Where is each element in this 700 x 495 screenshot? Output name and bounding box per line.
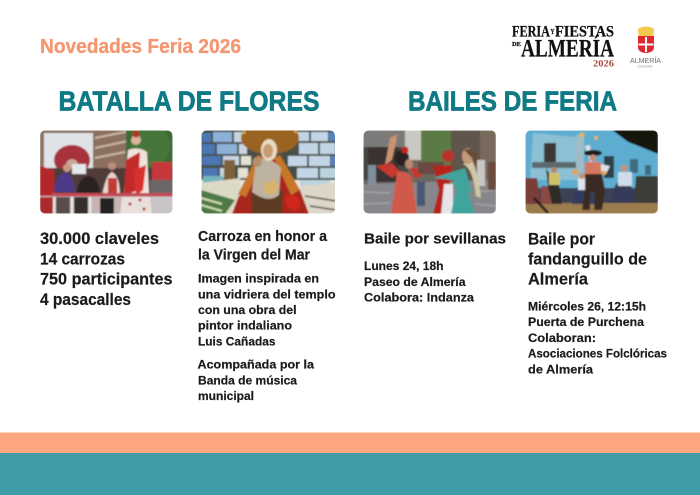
text: baile por fandanguillo de Almería: Asociaciones Folclóricas [528, 347, 667, 361]
text: carroza en honor a la Virgen del Mar [198, 229, 336, 403]
text: cifras de la batalla de flores: 14 carrozas [40, 250, 125, 268]
text: baile por sevillanas [364, 232, 506, 305]
text: carroza en honor a la Virgen del Mar: la Virgen del Mar [198, 248, 310, 264]
logo: Feria y Fiestas de Almería 2026: FERIA [512, 24, 550, 41]
text: carroza en honor a la Virgen del Mar: Banda de música [198, 373, 297, 387]
text: baile por fandanguillo de Almería: Baile por [528, 230, 596, 248]
text: cifras de la batalla de flores [40, 230, 172, 309]
text: carroza en honor a la Virgen del Mar: pintor indaliano [198, 319, 292, 333]
icon: crown [638, 26, 654, 36]
photo: carroza de la batalla de flores [40, 126, 173, 214]
text: cifras de la batalla de flores: 30.000 claveles [40, 230, 159, 248]
heading: Bailes de Feria: BAILES DE FERIA [408, 86, 617, 117]
logo: Feria y Fiestas de Almería 2026 [512, 24, 614, 70]
logo: escudo Almería Ciudad [630, 26, 661, 68]
title: Novedades Feria 2026: Novedades Feria 2026 [40, 36, 241, 58]
text: carroza en honor a la Virgen del Mar: municipal [198, 389, 254, 403]
text: baile por fandanguillo de Almería: Almería [528, 270, 589, 288]
text: baile por fandanguillo de Almería: de Almería [528, 363, 593, 377]
text: baile por fandanguillo de Almería: fandanguillo de [528, 250, 647, 268]
text: carroza en honor a la Virgen del Mar: una vidriera del templo [198, 288, 336, 302]
text: baile por fandanguillo de Almería: Colaboran: [528, 331, 596, 345]
logo: Feria y Fiestas de Almería 2026: 2026 [593, 60, 614, 70]
text: cifras de la batalla de flores: 4 pasacalles [40, 291, 131, 309]
photo: vidriera de la Virgen del Mar [202, 130, 335, 214]
logo: Feria y Fiestas de Almería 2026: DE [512, 41, 521, 48]
text: baile por sevillanas: Paseo de Almería [364, 275, 466, 289]
text: baile por fandanguillo de Almería [528, 230, 667, 377]
text: baile por sevillanas: Lunes 24, 18h [364, 259, 444, 273]
icon: shield [638, 36, 654, 53]
footer band: peach [0, 432, 700, 453]
footer band: teal [0, 453, 700, 495]
logo: Feria y Fiestas de Almería 2026: ALMERÍA [521, 35, 614, 63]
text: carroza en honor a la Virgen del Mar: Acompañada por la [198, 358, 314, 372]
text: baile por sevillanas: Baile por sevillanas [364, 232, 506, 248]
text: carroza en honor a la Virgen del Mar: Imagen inspirada en [198, 272, 319, 286]
text: cifras de la batalla de flores: 750 participantes [40, 271, 172, 289]
heading: Batalla de Flores: BATALLA DE FLORES [58, 86, 320, 117]
photo: baile por fandanguillo [525, 130, 658, 214]
text: carroza en honor a la Virgen del Mar: con una obra del [198, 303, 296, 317]
logo: Feria y Fiestas de Almería 2026: FIESTAS [555, 24, 614, 41]
text: carroza en honor a la Virgen del Mar: Luis Cañadas [198, 334, 276, 348]
text: baile por fandanguillo de Almería: Puerta de Purchena [528, 315, 644, 329]
text: baile por sevillanas: Colabora: Indanza [364, 291, 474, 305]
text: Almería: ALMERÍA [630, 56, 661, 65]
text: carroza en honor a la Virgen del Mar: Carroza en honor a [198, 229, 328, 245]
logo: Feria y Fiestas de Almería 2026: Y [550, 28, 554, 36]
text: baile por fandanguillo de Almería: Miércoles 26, 12:15h [528, 299, 646, 313]
photo: baile por sevillanas [363, 130, 496, 214]
text: Ciudad: CIUDAD [638, 64, 653, 68]
